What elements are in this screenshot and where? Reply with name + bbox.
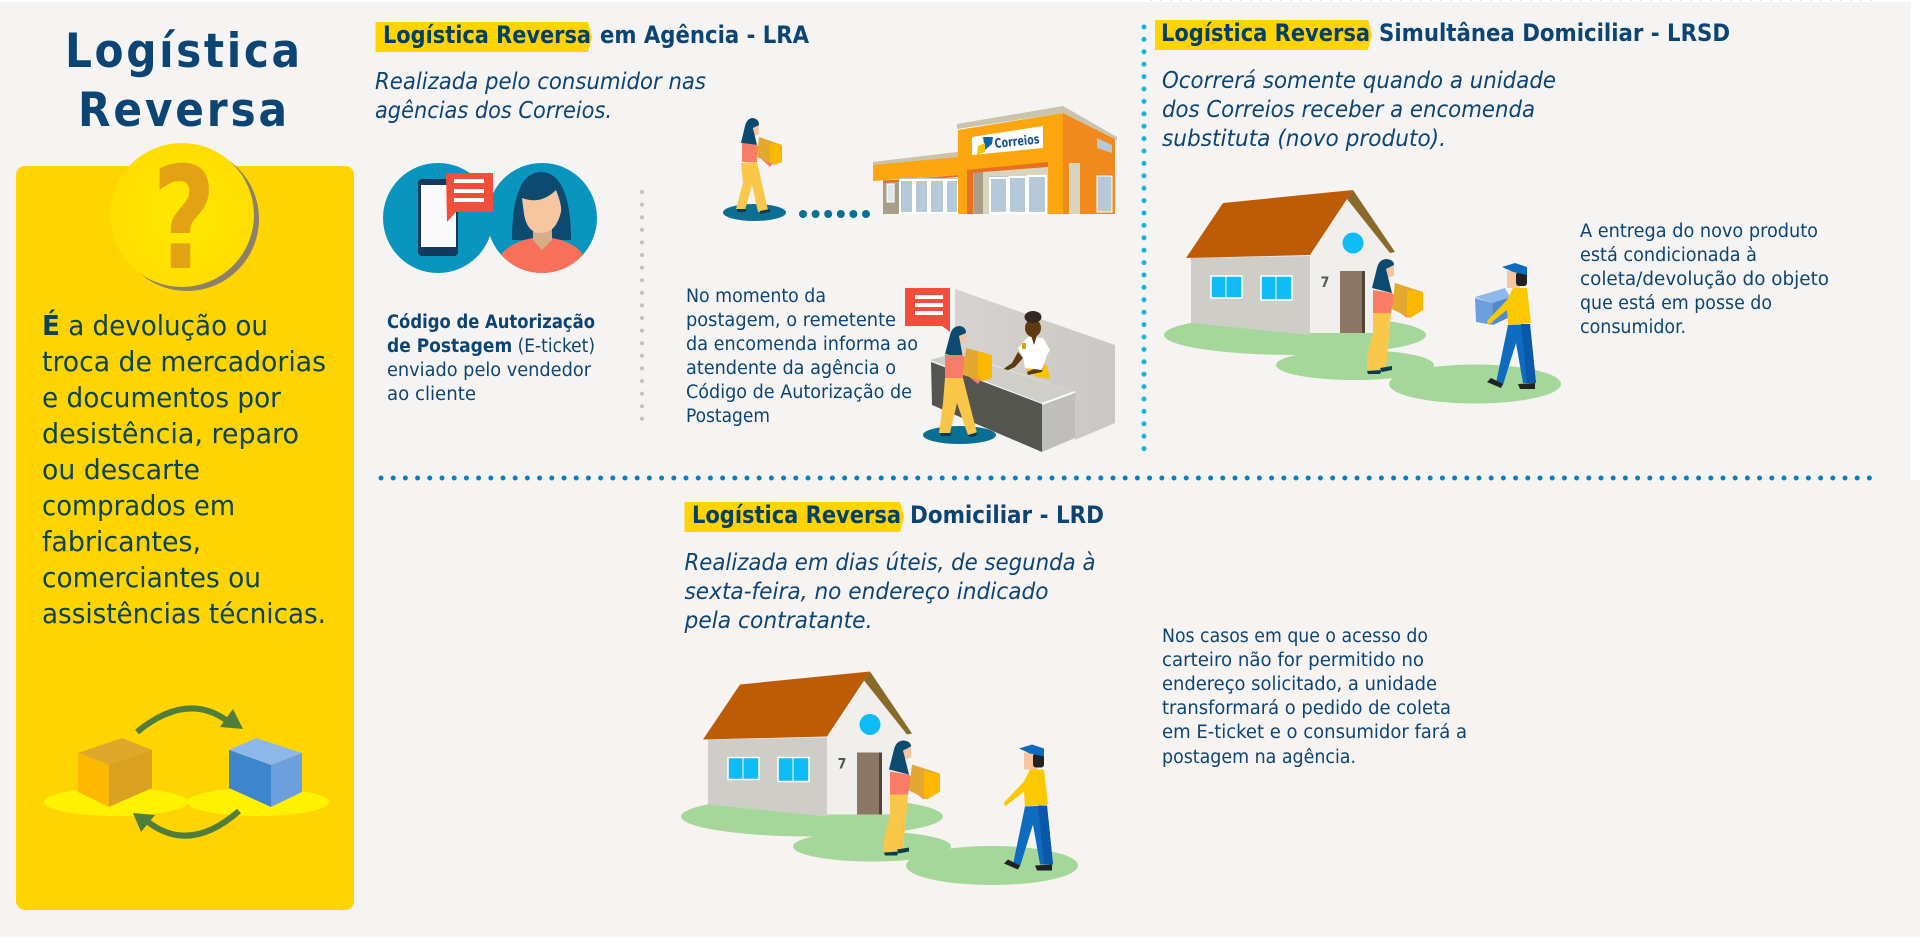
heading: LRD: Logística Reversa	[692, 501, 901, 529]
customer at counter	[939, 326, 992, 437]
illustration: house with customer: 7	[1321, 275, 1329, 291]
dotted path to agency	[803, 210, 870, 218]
text: when access is not permitted: transformará o pedido de coleta	[1162, 698, 1451, 719]
title: Logística	[65, 24, 300, 79]
title	[65, 24, 300, 138]
heading: LRA	[376, 21, 809, 52]
text: at posting: Código de Autorização de	[686, 382, 912, 403]
LRSD description: substituta (novo produto).	[1162, 126, 1446, 152]
LRD description: sexta-feira, no endereço indicado	[684, 579, 1048, 605]
definition text: e documentos por	[42, 381, 282, 414]
text: authorization code	[387, 312, 595, 405]
definition text: assistências técnicas.	[42, 597, 326, 630]
text: authorization code: Código de Autorização	[387, 312, 595, 333]
attendant	[1002, 311, 1050, 379]
definition text: troca de mercadorias	[42, 345, 326, 378]
text: condition of delivery	[1580, 221, 1829, 338]
icon: exchange of boxes	[44, 708, 329, 836]
heading: LRSD	[1155, 19, 1730, 50]
definition text: comprados em	[42, 489, 235, 522]
LRD description: Realizada em dias úteis, de segunda à	[684, 550, 1096, 576]
illustration: house with customer	[1164, 190, 1561, 404]
text: when access is not permitted: Nos casos em que o acesso do	[1162, 626, 1428, 647]
text: condition of delivery: consumidor.	[1580, 317, 1686, 338]
panel: LRD	[681, 501, 1467, 885]
definition text	[42, 308, 326, 630]
text: authorization code: de Postagem (E-ticket)	[387, 336, 595, 357]
icon: customer walking to agency	[723, 118, 786, 221]
text: when access is not permitted: carteiro não for permitido no	[1162, 650, 1424, 671]
box held by courier	[1475, 288, 1510, 325]
vertical dotted divider	[1142, 27, 1146, 452]
text: authorization code: enviado pelo vendedor	[387, 360, 591, 381]
panel: LRSD	[1155, 19, 1829, 404]
heading: LRA: Logística Reversa	[383, 21, 591, 49]
text: authorization code: ao cliente	[387, 384, 476, 405]
heading: LRD: Domiciliar - LRD	[910, 501, 1104, 529]
text: condition of delivery: está condicionada à	[1580, 245, 1757, 266]
text: condition of delivery: que está em posse do	[1580, 293, 1772, 314]
text: condition of delivery: A entrega do novo produto	[1580, 221, 1818, 242]
LRA description: agências dos Correios.	[375, 98, 612, 124]
heading: LRSD: Simultânea Domiciliar - LRSD	[1379, 19, 1730, 47]
icon: agency counter scene	[905, 288, 1115, 452]
LRA description: Realizada pelo consumidor nas	[375, 69, 706, 95]
heading: LRSD: Logística Reversa	[1161, 19, 1370, 47]
definition text: ou descarte	[42, 453, 200, 486]
panel: LRA	[375, 21, 1117, 452]
text: when access is not permitted	[1162, 626, 1467, 768]
icon: Correios agency building: Correios	[994, 132, 1040, 152]
text: when access is not permitted: em E-ticket e o consumidor fará a	[1162, 722, 1467, 743]
LRSD description: Ocorrerá somente quando a unidade	[1162, 68, 1556, 94]
LRD description: pela contratante.	[683, 608, 872, 634]
icon: question mark coin: ?	[152, 137, 216, 302]
LRSD description	[1162, 68, 1556, 152]
horizontal dotted divider	[381, 476, 1873, 480]
definition text: É a devolução ou	[42, 308, 268, 342]
icon: Correios agency building	[873, 106, 1117, 214]
text: at posting: No momento da	[686, 286, 826, 307]
text: when access is not permitted: postagem na agência.	[1162, 747, 1356, 768]
text: at posting: da encomenda informa ao	[686, 334, 918, 355]
definition text: fabricantes,	[42, 525, 201, 558]
definition text: desistência, reparo	[42, 417, 299, 450]
title: Reversa	[78, 83, 287, 138]
heading: LRD	[684, 501, 1104, 532]
panel: definition	[16, 137, 354, 910]
text: at posting: Postagem	[686, 406, 770, 427]
text: at posting: atendente da agência o	[686, 358, 896, 379]
text: at posting	[686, 286, 918, 427]
heading: LRA: em Agência - LRA	[600, 21, 809, 49]
icon: phone and customer	[383, 163, 597, 273]
LRD description	[683, 550, 1096, 634]
icon: question mark coin	[110, 137, 259, 302]
LRSD description: dos Correios receber a encomenda	[1162, 97, 1535, 123]
illustration: house, customer and courier	[681, 672, 1078, 885]
text: at posting: postagem, o remetente	[686, 310, 896, 331]
LRA description	[375, 69, 706, 124]
text: condition of delivery: coleta/devolução do objeto	[1580, 269, 1829, 290]
courier	[1487, 263, 1536, 389]
definition text: comerciantes ou	[42, 561, 261, 594]
text: when access is not permitted: endereço solicitado, a unidade	[1162, 674, 1437, 695]
